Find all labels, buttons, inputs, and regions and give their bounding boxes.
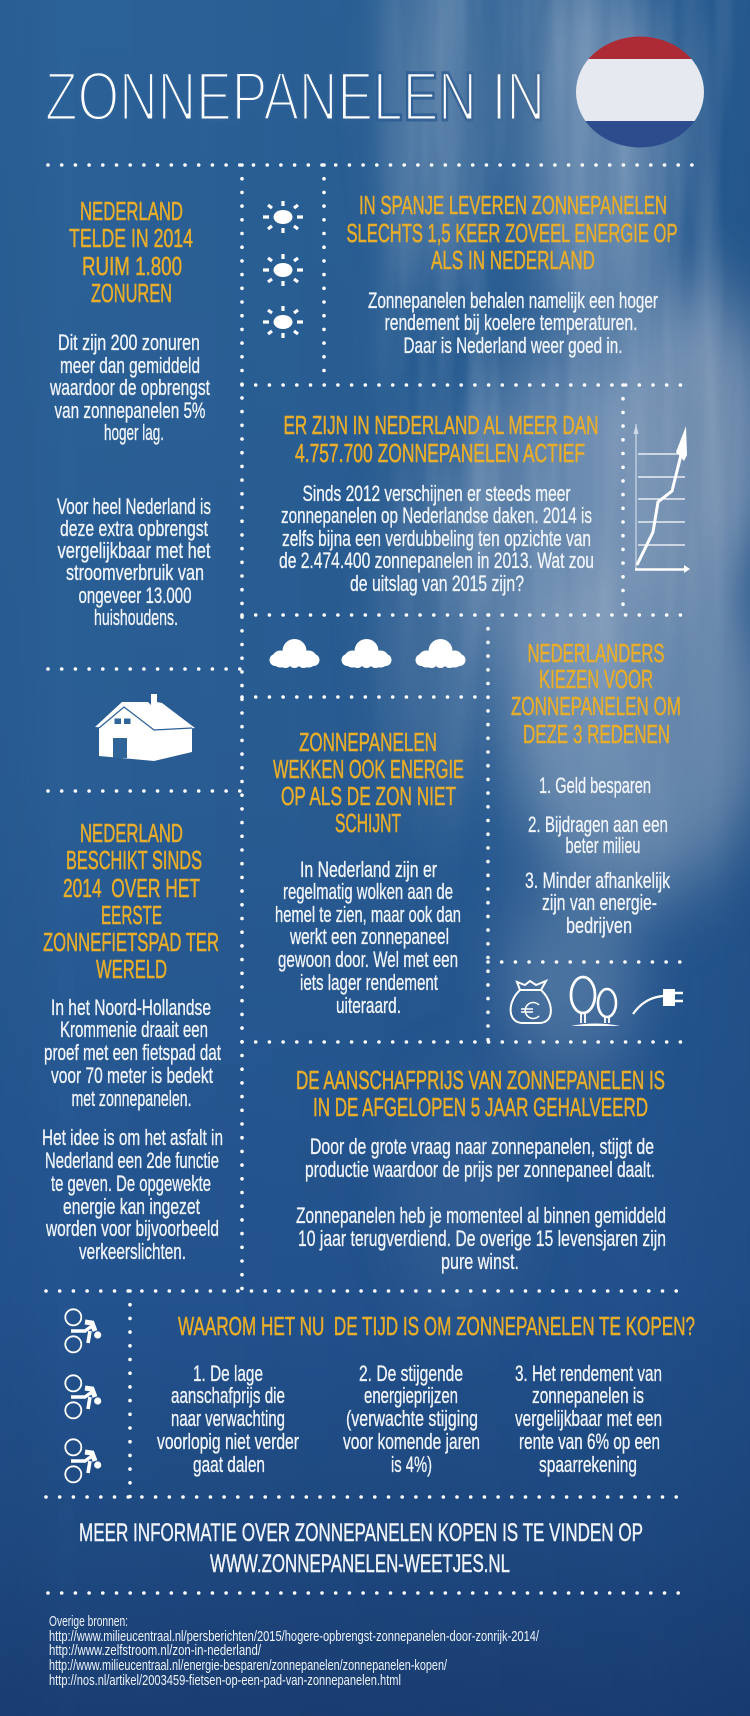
text: opbrengst: meer dan gemiddeld — [60, 353, 200, 378]
text: verdubbeling: zonnepanelen op Nederlandse daken. 2014 is — [281, 503, 592, 528]
icons: three clouds — [270, 639, 466, 668]
text: rendement: Daar is Nederland weer goed in. — [404, 333, 622, 358]
heading: zonuren: ZONUREN — [91, 280, 172, 308]
text: opbrengst — [49, 330, 210, 445]
text: terugverdiend: pure winst. — [441, 1249, 519, 1274]
sources: http://nos.nl/artikel/2003459-fietsen-op-een-pad-van-zonnepanelen.html — [49, 1672, 401, 1689]
column: rendement: vergelijkbaar met een — [515, 1406, 662, 1431]
heading: zonnefietspad — [43, 820, 219, 984]
text: huishoudens — [57, 494, 211, 630]
text: asfalt: verkeerslichten. — [79, 1239, 186, 1264]
heading: 4.757.700: 4.757.700 ZONNEPANELEN ACTIEF — [295, 440, 585, 468]
panel: aanschafprijs — [296, 1067, 666, 1274]
column: energieprijzen: energieprijzen — [364, 1383, 458, 1408]
text: opbrengst: van zonnepanelen 5% — [54, 398, 206, 423]
text: huishoudens: deze extra opbrengst — [60, 516, 208, 541]
text: opbrengst: Dit zijn 200 zonuren — [58, 330, 200, 355]
icon: Dutch flag circle — [576, 36, 704, 149]
text: asfalt — [42, 1125, 223, 1264]
column: rendement: zonnepanelen is — [532, 1383, 644, 1408]
text: verdubbeling: de 2.474.400 zonnepanelen in 2013. Wat zou — [279, 548, 594, 573]
text: opbrengst: hoger lag. — [104, 420, 164, 445]
list: redenen: 2. Bijdragen aan een — [528, 812, 668, 837]
heading: zonnefietspad: 2014 OVER HET — [63, 875, 200, 903]
text: Krommenie — [44, 995, 221, 1111]
icons: three suns — [263, 201, 303, 338]
text: rendement bij wolken: hemel te zien, maar ook dan — [275, 902, 461, 927]
heading: zon schijnt niet: ZONNEPANELEN — [299, 729, 437, 757]
list: redenen: 3. Minder afhankelijk — [525, 868, 671, 893]
column: aanschafprijs: gaat dalen — [193, 1452, 265, 1477]
text: Krommenie: voor 70 meter is bedekt — [51, 1063, 213, 1088]
text: asfalt: te geven. De opgewekte — [51, 1171, 211, 1196]
column: rendement — [515, 1361, 662, 1477]
column: aanschafprijs: aanschafprijs die — [171, 1383, 285, 1408]
panel: waarom nu — [157, 1313, 695, 1477]
list: redenen: zijn van energie- — [542, 890, 657, 915]
icon: trees — [571, 977, 620, 1026]
text: prijs daalt — [305, 1134, 655, 1182]
text: huishoudens: stroomverbruik van — [66, 560, 204, 585]
heading: zonnefietspad: EERSTE — [101, 902, 162, 930]
list: redenen: 1. Geld besparen — [539, 773, 651, 798]
text: huishoudens: huishoudens. — [94, 605, 178, 630]
sources: http://www.milieucentraal.nl/persberichten/2015/hogere-opbrengst-zonnepanelen-door-zonrijk-2014/ — [49, 1628, 540, 1645]
panel: zonuren 2014 — [49, 198, 211, 630]
text: rendement — [368, 288, 658, 358]
column: rendement: rente van 6% op een — [519, 1429, 660, 1454]
heading: zon schijnt niet: OP ALS DE ZON NIET — [281, 783, 456, 811]
heading: 3 redenen: NEDERLANDERS — [528, 640, 664, 668]
sources — [49, 1613, 540, 1689]
icon: money bag — [511, 981, 551, 1023]
heading: zonnefietspad: BESCHIKT SINDS — [66, 847, 202, 875]
chart icon: rising line — [634, 424, 690, 573]
text: verdubbeling: zelfs bijna een verdubbeling ten opzichte van — [282, 526, 591, 551]
panel: wolken — [273, 729, 464, 1018]
heading: 3 redenen — [511, 640, 681, 749]
panel: Spanje — [346, 192, 678, 358]
text: rendement bij wolken: iets lager rendement — [300, 970, 438, 995]
text: asfalt: energie kan ingezet — [63, 1194, 200, 1219]
panel: aantal zonnepanelen — [279, 412, 598, 596]
text: huishoudens: Voor heel Nederland is — [57, 494, 211, 519]
heading: zonuren — [69, 198, 193, 308]
heading: aanschafprijs — [296, 1067, 665, 1122]
heading: zonnefietspad: WERELD — [96, 956, 167, 984]
list: redenen: bedrijven — [566, 913, 632, 938]
heading: zonnefietspad: ZONNEFIETSPAD TER — [43, 929, 219, 957]
text: terugverdiend — [296, 1203, 666, 1274]
heading: zonuren: NEDERLAND — [80, 198, 183, 226]
heading: zon schijnt niet: WEKKEN OOK ENERGIE — [273, 756, 464, 784]
heading: zon schijnt niet: SCHIJNT — [335, 810, 401, 838]
column: energieprijzen — [343, 1361, 480, 1477]
text: opbrengst: waardoor de opbrengst — [49, 375, 210, 400]
panel: redenen — [511, 640, 681, 938]
text: huishoudens: ongeveer 13.000 — [78, 583, 192, 608]
text: verdubbeling — [279, 481, 594, 596]
text: rendement bij wolken: gewoon door. Wel met een — [278, 947, 458, 972]
panel: fietspad — [42, 820, 223, 1264]
call to action — [79, 1519, 643, 1578]
call to action: WWW.ZONNEPANELEN-WEETJES.NL — [210, 1550, 510, 1578]
column: aanschafprijs: naar verwachting — [171, 1406, 285, 1431]
text: asfalt: Nederland een 2de functie — [45, 1148, 219, 1173]
column: energieprijzen: is 4%) — [391, 1452, 432, 1477]
column: aanschafprijs: voorlopig niet verder — [157, 1429, 299, 1454]
text: rendement bij wolken: regelmatig wolken aan de — [283, 879, 453, 904]
dotted divider grid — [46, 165, 694, 1593]
column: aanschafprijs — [157, 1361, 299, 1477]
text: Krommenie: met zonnepanelen. — [72, 1086, 192, 1111]
heading: zonuren: TELDE IN 2014 — [69, 225, 193, 253]
column: energieprijzen: voor komende jaren — [343, 1429, 480, 1454]
text: Krommenie: Krommenie draait een — [60, 1017, 208, 1042]
title: ZONNEPANELEN IN — [45, 58, 545, 135]
sources: http://www.zelfstroom.nl/zon-in-nederland/ — [49, 1642, 262, 1659]
text: Krommenie: proef met een fietspad dat — [44, 1040, 221, 1065]
sources: Overige bronnen: — [49, 1613, 128, 1630]
text: Krommenie: In het Noord-Hollandse — [51, 995, 211, 1020]
text: huishoudens: vergelijkbaar met het — [58, 538, 210, 563]
column: energieprijzen: 2. De stijgende — [359, 1361, 463, 1386]
icon: house — [95, 694, 195, 761]
column: energieprijzen: (verwachte stijging — [346, 1406, 478, 1431]
text: rendement bij wolken: uiteraard. — [336, 993, 401, 1018]
heading: 4.757.700: ER ZIJN IN NEDERLAND AL MEER DAN — [284, 412, 598, 440]
text: verdubbeling: Sinds 2012 verschijnen er steeds meer — [302, 481, 570, 506]
column: rendement: 3. Het rendement van — [515, 1361, 662, 1386]
column: rendement: spaarrekening — [539, 1452, 637, 1477]
heading: Spanje — [346, 192, 678, 275]
heading: 3 redenen: KIEZEN VOOR — [539, 666, 653, 694]
icons: three cyclists — [65, 1309, 101, 1482]
sources: http://www.milieucentraal.nl/energie-besparen/zonnepanelen/zonnepanelen-kopen/ — [49, 1657, 448, 1674]
text: asfalt: worden voor bijvoorbeeld — [45, 1216, 219, 1241]
text: rendement bij wolken: werkt een zonnepaneel — [289, 924, 449, 949]
heading: Spanje: ALS IN NEDERLAND — [431, 247, 595, 275]
heading: zon schijnt niet — [273, 729, 464, 838]
text: asfalt: Het idee is om het asfalt in — [42, 1125, 223, 1150]
text: rendement bij wolken: In Nederland zijn er — [300, 857, 437, 882]
heading: zonnefietspad: NEDERLAND — [80, 820, 183, 848]
text: rendement: rendement bij koelere temperaturen. — [384, 310, 638, 335]
list: redenen — [525, 773, 671, 938]
icon: power plug — [633, 989, 683, 1014]
list: redenen: beter milieu — [566, 833, 640, 858]
heading: 4.757.700 — [284, 412, 598, 468]
heading: zonuren: RUIM 1.800 — [82, 253, 182, 281]
column: aanschafprijs: 1. De lage — [193, 1361, 263, 1386]
text: rendement bij wolken — [275, 857, 461, 1018]
heading: 3 redenen: DEZE 3 REDENEN — [523, 721, 670, 749]
text: verdubbeling: de uitslag van 2015 zijn? — [350, 571, 524, 596]
